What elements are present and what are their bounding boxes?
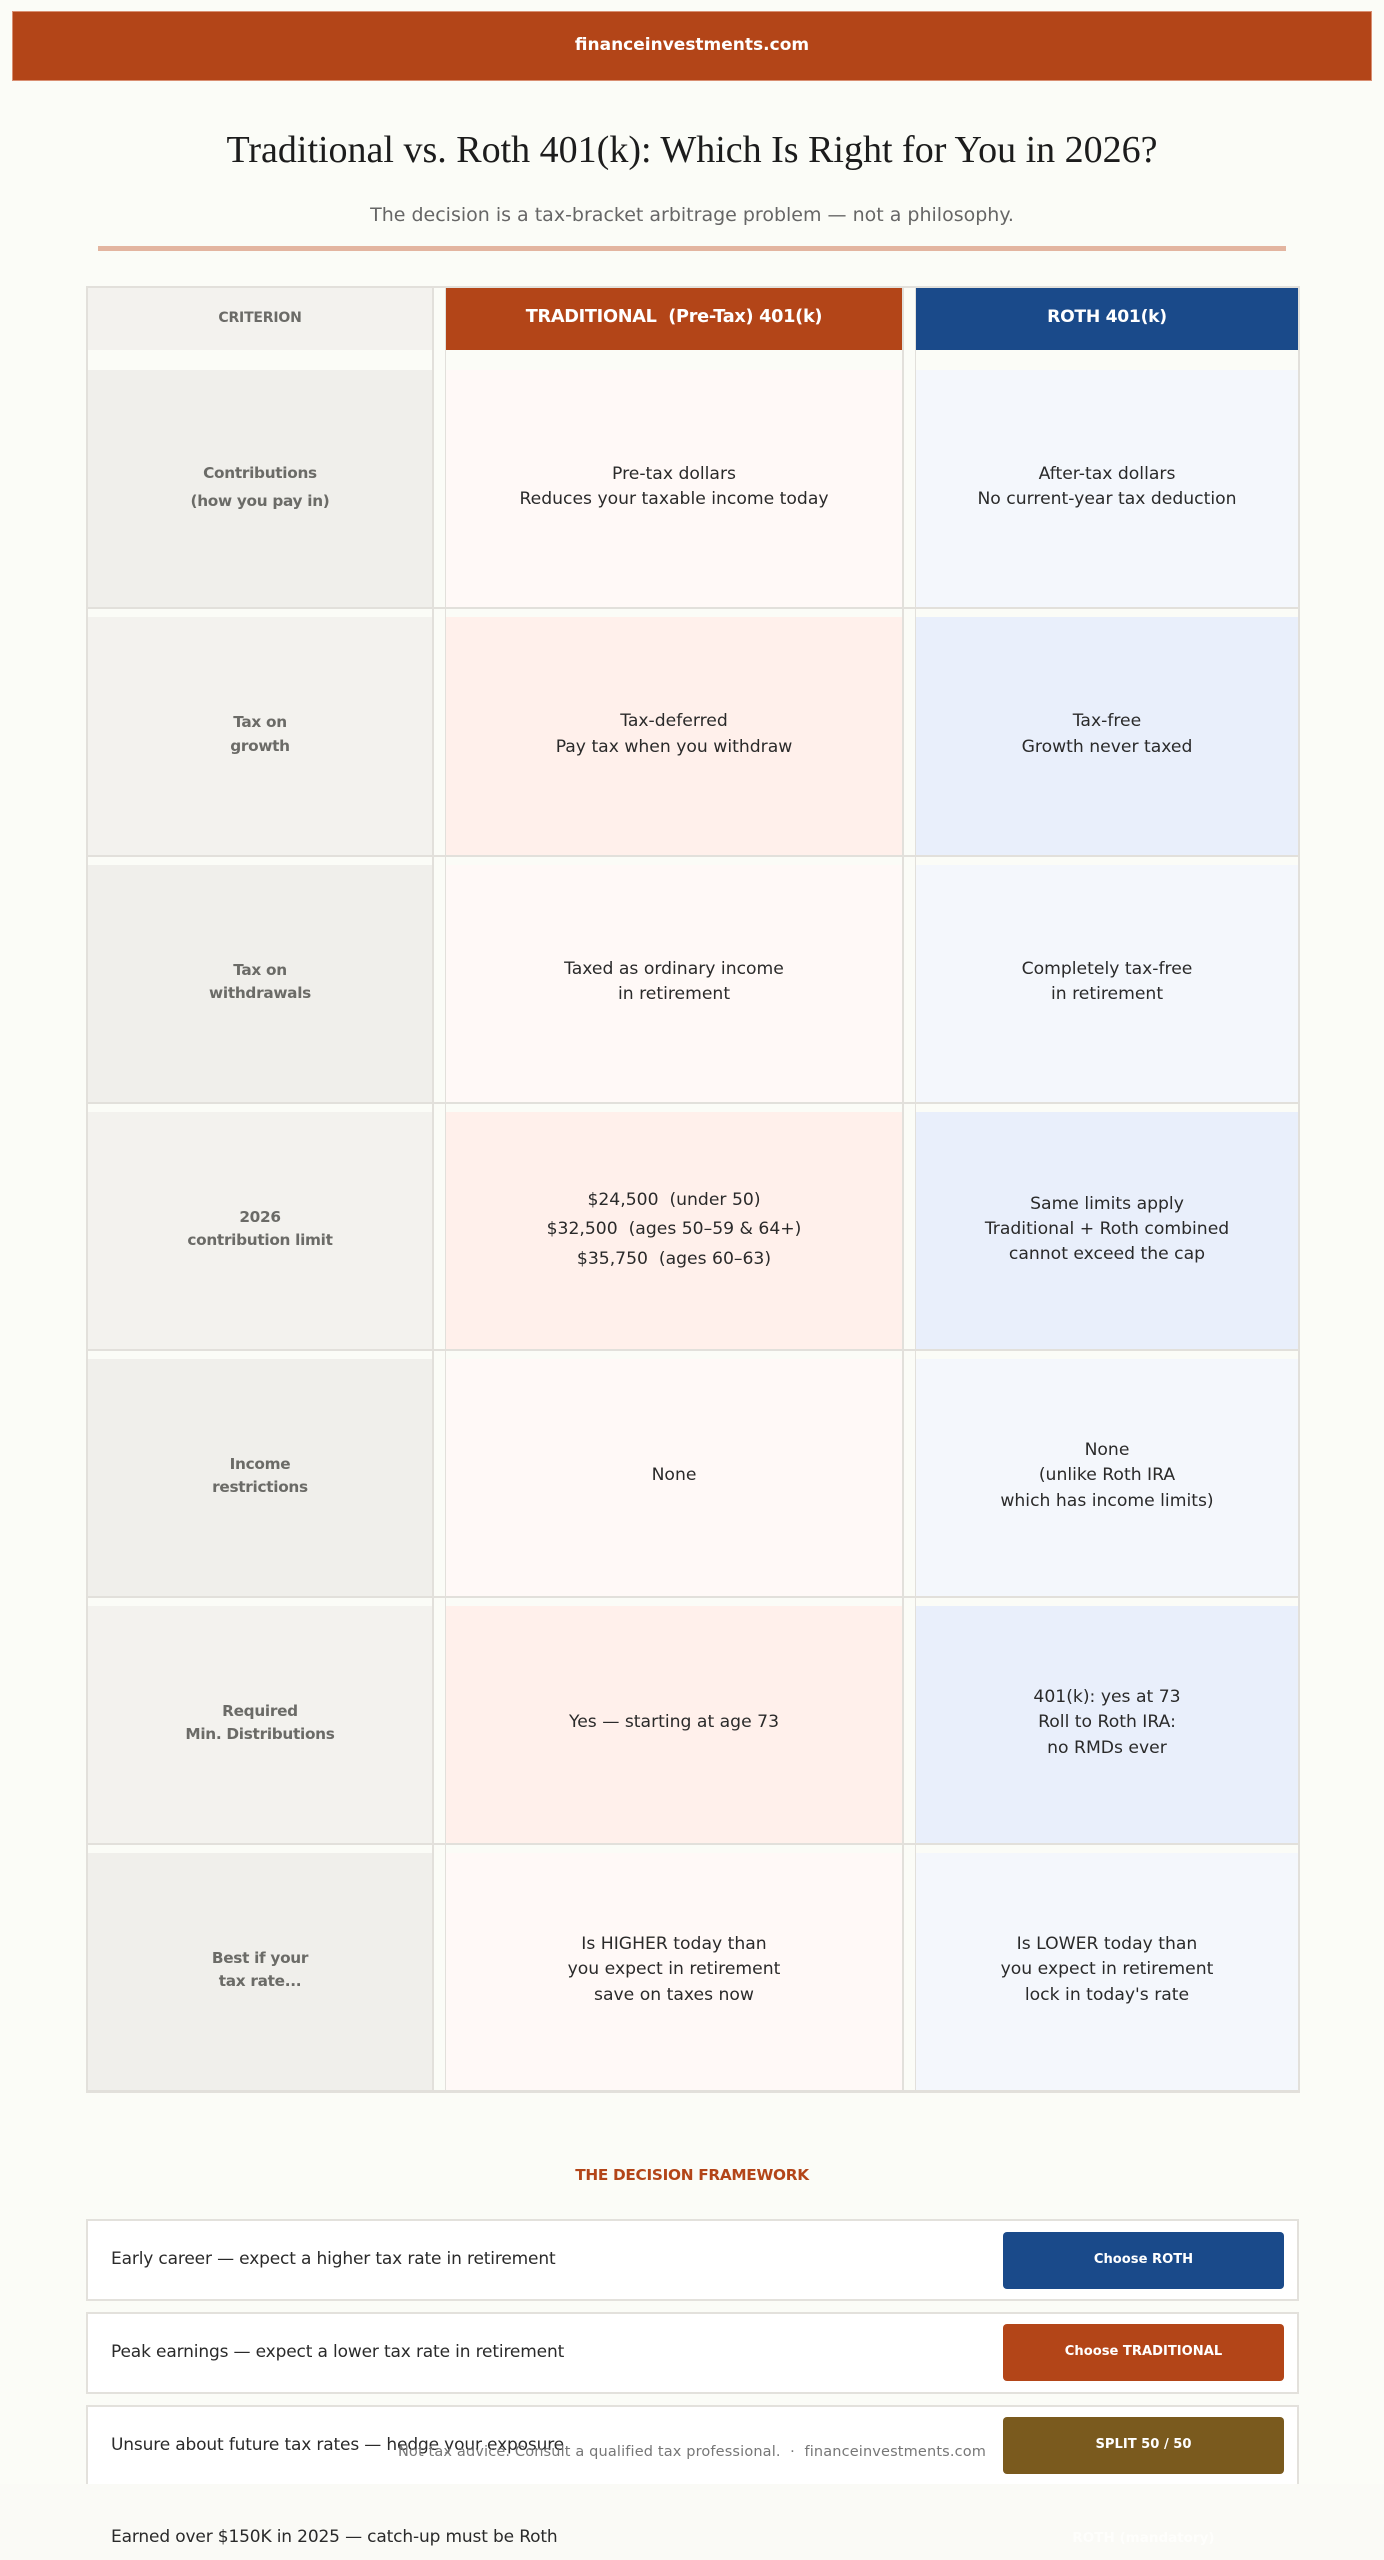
row 4 traditional: [446, 1112, 902, 1349]
row 5 label: income restrictions: Income: [230, 1454, 290, 1472]
row 6 traditional: Yes — starting at age 73: [569, 1712, 779, 1732]
footer band: [0, 2484, 1384, 2560]
row 5 roth: [916, 1359, 1298, 1596]
row 3 roth: [916, 865, 1298, 1102]
row 2 roth: [916, 617, 1298, 855]
row 3 roth: in retirement: [1051, 984, 1163, 1004]
title: Traditional vs. Roth 401(k): Which Is Right for You in 2026?: [226, 129, 1158, 171]
row 3 traditional: in retirement: [618, 984, 730, 1004]
row 4 traditional: $35,750 (ages 60–63): [577, 1249, 771, 1269]
row 4 label: contribution limit: contribution limit: [187, 1231, 333, 1249]
row 5 label: income restrictions: restrictions: [212, 1478, 308, 1496]
footer disclaimer: Not tax advice. Consult a qualified tax professional. · financeinvestments.com: [398, 2444, 986, 2460]
row 2 label: tax on growth: [88, 617, 432, 855]
header banner: financeinvestments.com: [575, 35, 809, 55]
button: split 50/50: [1003, 2417, 1284, 2474]
decision row: early career: [86, 2219, 1299, 2301]
row 2 roth: Growth never taxed: [1022, 736, 1192, 756]
button: choose roth: [1003, 2232, 1284, 2289]
row 1 roth: [916, 370, 1298, 607]
row 1 roth: After-tax dollars: [1039, 464, 1175, 484]
column header: criterion: [88, 288, 432, 350]
row 4 traditional: $32,500 (ages 50–59 & 64+): [547, 1219, 801, 1239]
row 4 label: contribution limit: 2026: [239, 1208, 281, 1226]
row 3 label: tax on withdrawals: withdrawals: [209, 984, 311, 1002]
row 5 roth: which has income limits): [1000, 1491, 1214, 1511]
button label: roth mandatory: ROTH (mandatory): [1072, 2530, 1215, 2546]
column header: roth: ROTH 401(k): [1047, 307, 1167, 327]
row 1 traditional: Reduces your taxable income today: [519, 489, 829, 509]
row 6 label: required minimum distributions: Required: [222, 1702, 298, 1720]
row 4 roth: [916, 1112, 1298, 1349]
button: choose traditional: [1003, 2324, 1284, 2381]
row 7 label: best if your tax rate: Best if your: [212, 1948, 308, 1966]
button: choose traditional: Choose TRADITIONAL: [1065, 2344, 1222, 2359]
row 7 traditional: you expect in retirement: [568, 1959, 780, 1979]
row 4 roth: Same limits apply: [1030, 1194, 1184, 1214]
row 3 roth: Completely tax-free: [1022, 959, 1192, 979]
row 6 roth: [916, 1606, 1298, 1843]
row 2 label: tax on growth: Tax on: [233, 713, 287, 731]
row 5 traditional: [446, 1359, 902, 1596]
row 7 roth: lock in today's rate: [1025, 1985, 1189, 2005]
row 1 label: contributions: [88, 370, 432, 607]
row 1 roth: No current-year tax deduction: [977, 489, 1237, 509]
row 7 traditional: Is HIGHER today than: [581, 1934, 767, 1954]
decision text: early career: Early career — expect a higher tax rate in retirement: [111, 2249, 556, 2269]
decision text: unsure: Unsure about future tax rates — hedge your exposure: [111, 2435, 564, 2455]
row 1 traditional: Pre-tax dollars: [612, 464, 736, 484]
row 2 traditional: Tax-deferred: [620, 711, 728, 731]
column header: criterion: CRITERION: [218, 310, 302, 326]
row 6 roth: no RMDs ever: [1047, 1738, 1167, 1758]
decision text: peak earnings: Peak earnings — expect a lower tax rate in retirement: [111, 2342, 564, 2362]
row 6 traditional: [446, 1606, 902, 1843]
row 4 roth: cannot exceed the cap: [1009, 1244, 1205, 1264]
title rule: [98, 246, 1286, 251]
row 5 label: income restrictions: [88, 1359, 432, 1596]
row 7 roth: [916, 1853, 1298, 2090]
column header: traditional: TRADITIONAL (Pre-Tax) 401(k): [526, 307, 822, 327]
row 6 roth: 401(k): yes at 73: [1033, 1687, 1181, 1707]
row 5 roth: (unlike Roth IRA: [1039, 1465, 1175, 1485]
row 4 roth: Traditional + Roth combined: [985, 1219, 1229, 1239]
row 7 label: best if your tax rate: [88, 1853, 432, 2090]
row 5 traditional: None: [652, 1465, 696, 1485]
row 7 roth: Is LOWER today than: [1017, 1934, 1197, 1954]
column header: traditional: [446, 288, 902, 350]
row 7 traditional: save on taxes now: [594, 1985, 754, 2005]
row 1 traditional: [446, 370, 902, 607]
row 3 traditional: [446, 865, 902, 1102]
row 7 label: best if your tax rate: tax rate...: [219, 1972, 301, 1990]
row 1 label: contributions: (how you pay in): [191, 492, 329, 510]
row 3 traditional: Taxed as ordinary income: [564, 959, 784, 979]
decision row: peak earnings: [86, 2312, 1299, 2394]
row 4 label: contribution limit: [88, 1112, 432, 1349]
row 5 roth: None: [1085, 1440, 1129, 1460]
row 7 traditional: [446, 1853, 902, 2090]
row 2 label: tax on growth: growth: [230, 736, 290, 754]
section heading: decision framework: THE DECISION FRAMEWORK: [575, 2166, 809, 2184]
row 1 label: contributions: Contributions: [203, 464, 317, 482]
button: split 50/50: SPLIT 50 / 50: [1095, 2437, 1192, 2452]
row 6 label: required minimum distributions: [88, 1606, 432, 1843]
button: choose roth: Choose ROTH: [1094, 2252, 1193, 2267]
row 2 roth: Tax-free: [1073, 711, 1141, 731]
row 3 label: tax on withdrawals: Tax on: [233, 960, 287, 978]
row 6 label: required minimum distributions: Min. Distributions: [185, 1725, 335, 1743]
row 2 traditional: [446, 617, 902, 855]
row 2 traditional: Pay tax when you withdraw: [556, 736, 792, 756]
row 7 roth: you expect in retirement: [1001, 1959, 1213, 1979]
decision text: earned over 150k: Earned over $150K in 2025 — catch-up must be Roth: [111, 2527, 558, 2547]
decision row: unsure: [86, 2405, 1299, 2505]
row 3 label: tax on withdrawals: [88, 865, 432, 1102]
subtitle: The decision is a tax-bracket arbitrage problem — not a philosophy.: [370, 204, 1014, 226]
row 4 traditional: $24,500 (under 50): [587, 1190, 761, 1210]
row 6 roth: Roll to Roth IRA:: [1038, 1712, 1176, 1732]
header banner: [12, 11, 1372, 81]
column header: roth: [916, 288, 1298, 350]
